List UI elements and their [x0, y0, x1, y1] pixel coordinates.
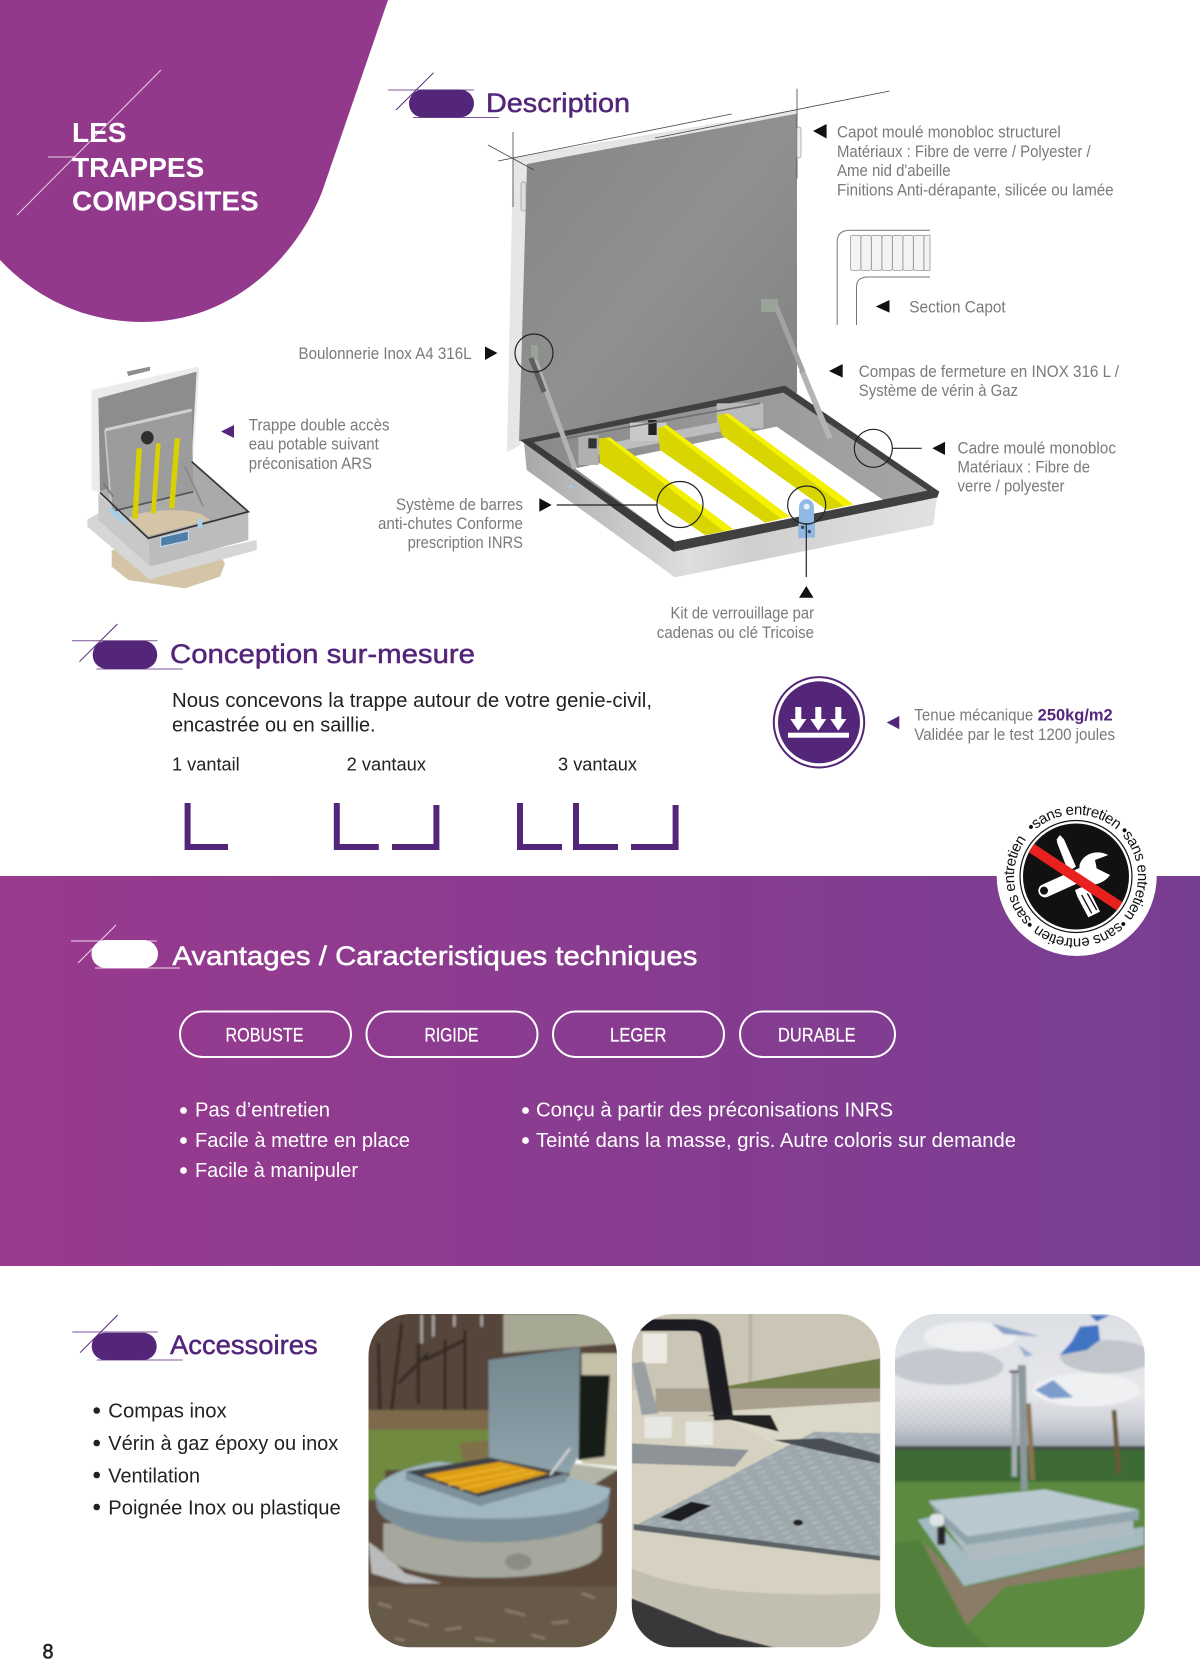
- callout: anti-fall bars: prescription INRS: [408, 534, 523, 552]
- text: conception intro: Nous concevons la trappe autour de votre genie-civil,: [172, 690, 652, 712]
- list: advantages right: Conçu à partir des préconisations INRS: [536, 1099, 893, 1122]
- illustration: double access trap: [87, 367, 257, 588]
- list: accessories: Ventilation: [108, 1465, 200, 1487]
- diagram: 2 vantaux: [337, 755, 436, 847]
- tag: LEGER: [553, 1012, 724, 1057]
- list: accessories: Poignée Inox ou plastique: [108, 1497, 341, 1519]
- heading: Description: [388, 73, 630, 118]
- callout: lid: Finitions Anti-dérapante, silicée ou lamée: [837, 182, 1114, 200]
- callout: mechanical resistance: Tenue mécanique: [914, 707, 1033, 725]
- tag: DURABLE: DURABLE: [778, 1026, 856, 1047]
- callout: lock: cadenas ou clé Tricoise: [657, 624, 814, 642]
- callout: anti-fall bars: Système de barres: [396, 496, 523, 514]
- base frame with bars: [520, 360, 939, 577]
- diagram: 1 vantail: 1 vantail: [172, 755, 240, 775]
- diagram: lid section: [837, 230, 1006, 325]
- diagram: lid section: Section Capot: [909, 299, 1006, 317]
- callout: frame: verre / polyester: [958, 478, 1065, 496]
- page number: 8: [42, 1640, 54, 1664]
- illustration: main trap: [488, 89, 939, 577]
- tag: RIGIDE: [366, 1012, 538, 1057]
- circular label: •sans entretien •sans entretien •sans entretien •sans entretien: [1004, 805, 1148, 948]
- callout: lid: Ame nid d'abeille: [837, 162, 951, 180]
- list: advantages left: Pas d’entretien: [195, 1099, 330, 1122]
- heading: Conception sur-mesure: [72, 624, 475, 669]
- callout: lock: Kit de verrouillage par: [670, 605, 815, 623]
- tag: RIGIDE: RIGIDE: [424, 1026, 478, 1047]
- callout: frame: [854, 429, 1116, 496]
- list: advantages right: Teinté dans la masse, gris. Autre coloris sur demande: [536, 1129, 1016, 1152]
- callout: double access: Trappe double accès: [249, 416, 390, 434]
- callout: anti-fall bars: anti-chutes Conforme: [378, 515, 523, 533]
- callout: double access: eau potable suivant: [249, 436, 379, 454]
- callout: frame: Matériaux : Fibre de: [958, 458, 1090, 476]
- callout: anti-fall bars: [378, 482, 703, 552]
- callout: closing strut: [829, 363, 1119, 400]
- photo: open trap on round slab: [365, 1310, 625, 1650]
- tag: ROBUSTE: [180, 1012, 351, 1057]
- list: accessories: [93, 1401, 341, 1519]
- callout: mechanical resistance: [887, 707, 1115, 744]
- callout: lid: [813, 124, 1114, 200]
- diagram: 2 vantaux: 2 vantaux: [347, 755, 426, 775]
- heading: Description: Description: [486, 88, 630, 118]
- list: advantages left: Facile à manipuler: [195, 1159, 358, 1182]
- icon: crossed tools: [1028, 835, 1123, 917]
- heading: Conception sur-mesure: Conception sur-mesure: [170, 639, 475, 669]
- callout: mechanical resistance: Validée par le test 1200 joules: [914, 726, 1115, 744]
- lid: [488, 89, 890, 452]
- title: [17, 70, 259, 216]
- heading: Avantages: Avantages / Caracteristiques techniques: [172, 941, 697, 971]
- callout: bolts: Boulonnerie Inox A4 316L: [298, 345, 472, 363]
- icon: mechanical load: [774, 677, 864, 768]
- lock kit: [798, 499, 815, 538]
- list: accessories: Compas inox: [108, 1401, 227, 1423]
- callout: lid: Capot moulé monobloc structurel: [837, 124, 1061, 142]
- diagram: 1 vantail: [172, 755, 240, 847]
- list: advantages left: Facile à mettre en place: [195, 1129, 410, 1152]
- panel: advantages band background: [0, 876, 1200, 1266]
- panel: title blob: [0, 0, 388, 322]
- list: accessories: Vérin à gaz époxy ou inox: [108, 1433, 338, 1455]
- callout: frame: Cadre moulé monobloc: [958, 439, 1116, 457]
- callout: double access: préconisation ARS: [249, 455, 372, 473]
- tag: DURABLE: [740, 1012, 895, 1057]
- callout: mechanical resistance: 250kg/m2: [1038, 707, 1113, 725]
- photo: flush trap with checker plate: [628, 1310, 886, 1650]
- title: LES: [72, 117, 126, 148]
- callout: lid: Matériaux : Fibre de verre / Polyester /: [837, 143, 1091, 161]
- callout: closing strut: Compas de fermeture en INOX 316 L /: [859, 363, 1119, 381]
- photo: trap in a field: [890, 1310, 1153, 1650]
- heading: Accessoires: [72, 1315, 318, 1360]
- badge: sans entretien: [996, 805, 1157, 956]
- upper strut: [531, 358, 544, 392]
- callout: bolts: [298, 334, 553, 372]
- title: COMPOSITES: [72, 186, 259, 216]
- title: TRAPPES: [72, 152, 204, 183]
- callout: double access: [221, 416, 390, 473]
- diagram: 3 vantaux: [520, 755, 676, 847]
- tag: LEGER: LEGER: [610, 1026, 666, 1047]
- text: conception intro: [172, 690, 652, 737]
- heading: Accessoires: Accessoires: [170, 1330, 318, 1360]
- list: advantages right: [522, 1099, 1016, 1152]
- callout: closing strut: Système de vérin à Gaz: [859, 382, 1018, 400]
- heading: Avantages: [71, 925, 697, 971]
- diagram: 3 vantaux: 3 vantaux: [558, 755, 637, 775]
- list: advantages left: [180, 1099, 410, 1182]
- text: conception intro: encastrée ou en saillie.: [172, 715, 376, 737]
- tag: ROBUSTE: ROBUSTE: [226, 1026, 304, 1047]
- callout: lock: [657, 486, 826, 642]
